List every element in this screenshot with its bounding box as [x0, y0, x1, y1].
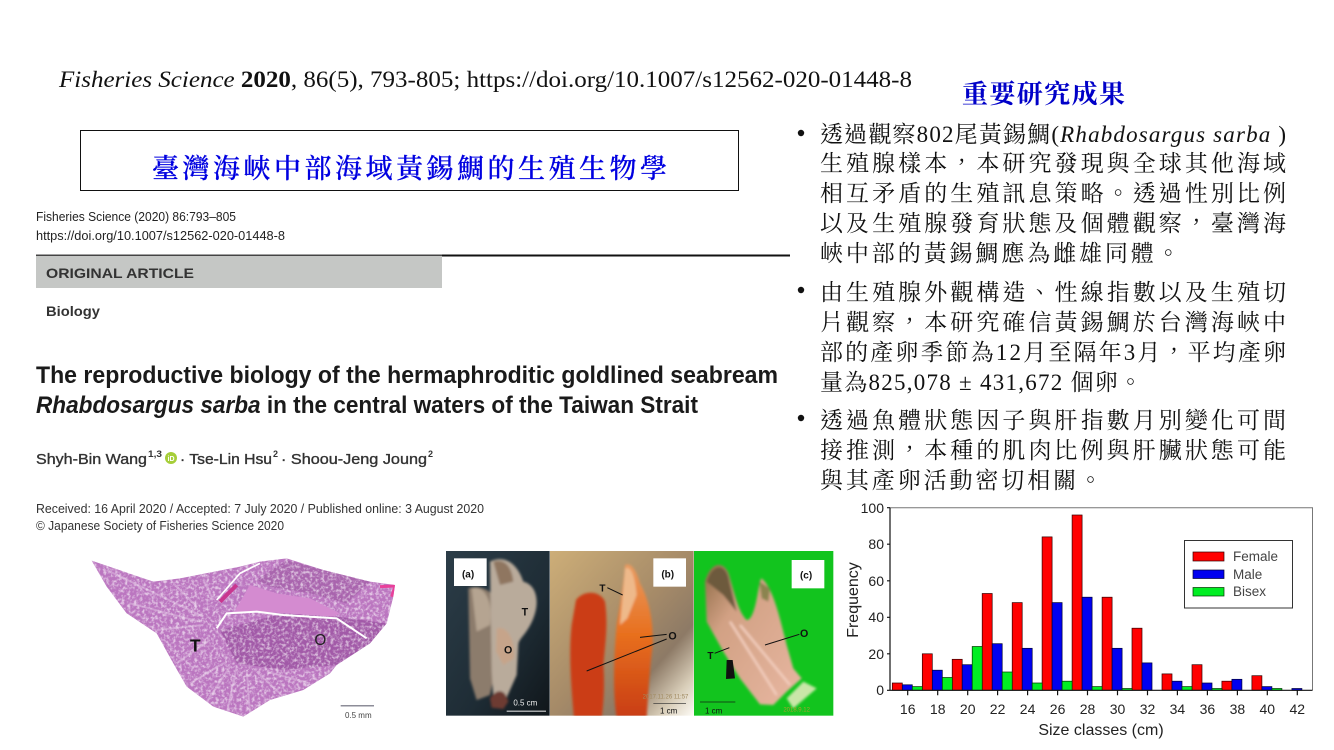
bullet one: 生殖腺樣本，本研究發現與全球其他海域 [820, 151, 1286, 176]
authors: · Shoou-Jeng Joung [281, 452, 427, 468]
photo b: T [599, 584, 605, 595]
y axis labels: 60 [868, 573, 884, 589]
photo c: (c) [800, 570, 812, 581]
scale bar: 0.5 mm [345, 711, 372, 720]
photo c [694, 551, 833, 716]
legend [1184, 540, 1292, 608]
x axis labels: 36 [1200, 701, 1215, 717]
bullet three [798, 408, 1286, 493]
bullet three: 接推測，本種的肌肉比例與肝臟狀態可能 [820, 438, 1286, 463]
original article banner: ORIGINAL ARTICLE [46, 265, 194, 281]
photo a: O [504, 645, 512, 657]
photo a: T [522, 607, 529, 619]
bullet two: 量為825,078 ± 431,672 個卵。 [820, 370, 1142, 395]
photo b: 1 cm [660, 707, 678, 716]
y axis labels: 0 [876, 682, 884, 698]
bullet two: 由生殖腺外觀構造、性線指數以及生殖切 [820, 280, 1286, 305]
y axis labels: 80 [868, 536, 884, 552]
paper title: Rhabdosargus sarba in the central waters of the Taiwan Strait [36, 392, 698, 419]
bullet two: 部的產卵季節為12月至隔年3月，平均產卵 [820, 340, 1286, 365]
axes and ticks [887, 508, 1312, 695]
paper title [36, 362, 778, 419]
photo b: O [668, 631, 677, 643]
label O: O [314, 632, 326, 649]
section label: Biology [46, 303, 100, 319]
bullet three: 與其產卵活動密切相關。 [820, 468, 1105, 493]
photo b: 2017.11.26 11:57 [643, 694, 689, 700]
photo a: 0.5 cm [513, 699, 538, 708]
x axis labels: 28 [1080, 701, 1095, 717]
bullet one: 峽中部的黃錫鯛應為雌雄同體。 [820, 241, 1183, 266]
scale bar [341, 705, 374, 720]
male bars [902, 597, 1302, 690]
photo b: (b) [661, 569, 674, 580]
journal reference: https://doi.org/10.1007/s12562-020-01448-8 [36, 229, 285, 243]
x axis labels: 40 [1260, 701, 1275, 717]
authors: · Tse-Lin Hsu [180, 452, 272, 468]
bullet two: 片觀察，本研究確信黃錫鯛於台灣海峽中 [820, 310, 1286, 335]
x axis labels: 22 [990, 701, 1006, 717]
bullet one: 相互矛盾的生殖訊息策略。透過性別比例 [820, 181, 1286, 206]
x axis labels: 24 [1020, 701, 1036, 717]
plot frame [890, 508, 1312, 690]
bullet two [798, 280, 1286, 395]
paper title: The reproductive biology of the hermaphroditic goldlined seabream [36, 362, 778, 389]
y axis labels [861, 500, 884, 698]
x axis labels: 30 [1110, 701, 1125, 717]
heading: key findings: 重要研究成果 [962, 80, 1125, 109]
y axis labels: 40 [868, 609, 884, 625]
photo c: T [707, 651, 713, 662]
title box [80, 130, 738, 190]
title box: 臺灣海峽中部海域黃錫鯛的生殖生物學 [152, 154, 667, 184]
y axis labels: 20 [868, 646, 884, 662]
bar chart: size-class frequency [845, 500, 1312, 739]
authors [36, 449, 433, 468]
x axis labels: 26 [1050, 701, 1066, 717]
x axis labels: 34 [1170, 701, 1185, 717]
photo b [550, 551, 694, 718]
journal reference [36, 210, 285, 243]
panel: key findings text [798, 122, 1286, 493]
x axis labels: 32 [1140, 701, 1155, 717]
photo a: (a) [462, 569, 474, 580]
x axis labels: 18 [930, 701, 946, 717]
x axis title: Size classes (cm) [1038, 722, 1164, 739]
legend: Male [1233, 567, 1262, 582]
x axis labels [900, 701, 1305, 717]
authors: iD [168, 456, 174, 463]
bisex bars [912, 646, 1282, 690]
publication dates [36, 501, 484, 533]
authors: 2 [428, 449, 433, 459]
bullet one: 以及生殖腺發育狀態及個體觀察，臺灣海 [820, 211, 1286, 236]
female bars [892, 515, 1262, 690]
original article banner [36, 256, 442, 288]
bullet three: 透過魚體狀態因子與肝指數月別變化可間 [820, 408, 1286, 433]
gonad photographs [446, 551, 833, 718]
authors: 2 [273, 449, 278, 459]
citation line: Fisheries Science 2020, 86(5), 793-805; https://doi.org/10.1007/s12562-020-01448-8 [58, 67, 912, 93]
panel: paper screenshot [36, 210, 790, 533]
x axis labels: 16 [900, 701, 916, 717]
photo c: O [800, 628, 808, 640]
authors: 1,3 [148, 449, 162, 459]
y axis title: Frequency [845, 562, 862, 638]
publication dates: Received: 16 April 2020 / Accepted: 7 July 2020 / Published online: 3 August 2020 [36, 501, 484, 516]
label T: T [190, 636, 201, 656]
legend: Female [1233, 549, 1278, 564]
bullet one: 透過觀察802尾黃錫鯛(Rhabdosargus sarba ) [820, 122, 1286, 147]
x axis labels: 38 [1230, 701, 1245, 717]
x axis labels: 42 [1290, 701, 1305, 717]
legend: Bisex [1233, 584, 1266, 599]
y axis labels: 100 [861, 500, 884, 516]
bullet one [798, 122, 1286, 266]
authors: Shyh-Bin Wang [36, 452, 147, 468]
photo c: 1 cm [705, 706, 723, 715]
histology section image [87, 557, 400, 720]
x axis labels: 20 [960, 701, 976, 717]
photo a [446, 551, 550, 716]
journal reference: Fisheries Science (2020) 86:793–805 [36, 210, 236, 224]
photo c: 2018.9.12 [783, 708, 811, 714]
publication dates: © Japanese Society of Fisheries Science 2020 [36, 518, 284, 533]
